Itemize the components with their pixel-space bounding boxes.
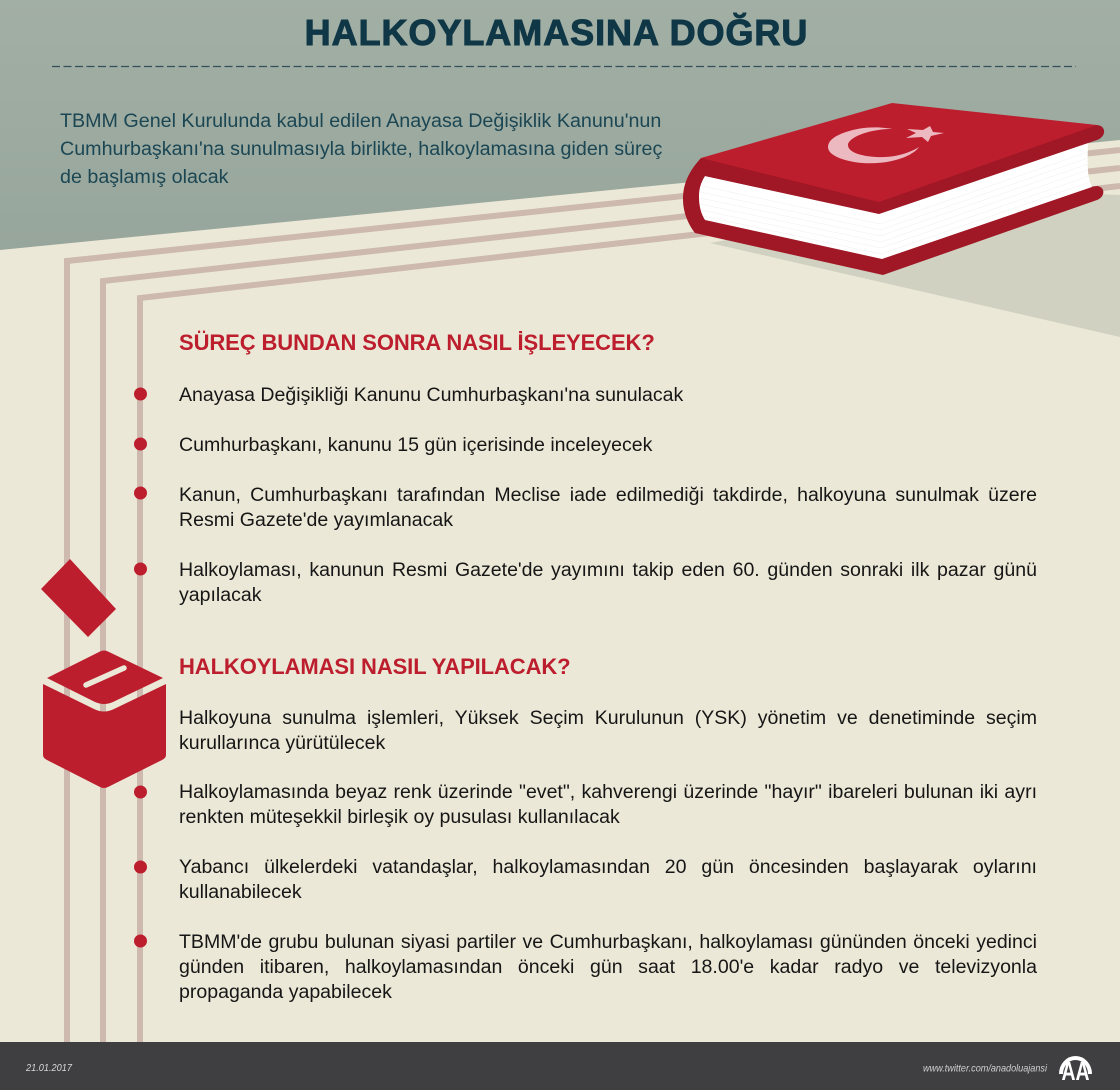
voting rules: Halkoyuna sunulma işlemleri, Yüksek Seçim Kurulunun (YSK) yönetim ve denetiminde seçim: [179, 707, 1037, 729]
process steps: Halkoylaması, kanunun Resmi Gazete'de yayımını takip eden 60. günden sonraki ilk pazar günü: [179, 559, 1037, 581]
heading: voting: HALKOYLAMASI NASIL YAPILACAK?: [179, 654, 570, 679]
heading: process: SÜREÇ BUNDAN SONRA NASIL İŞLEYECEK?: [179, 330, 655, 355]
voting rules: propaganda yapabilecek: [179, 981, 392, 1003]
footer date: 21.01.2017: [25, 1063, 72, 1074]
voting rules: kullanabilecek: [179, 881, 302, 903]
process steps: Cumhurbaşkanı, kanunu 15 gün içerisinde inceleyecek: [179, 434, 652, 456]
icon: ballot paper: [41, 559, 116, 637]
footer twitter address: www.twitter.com/anadoluajansi: [923, 1062, 1048, 1074]
bullets: [134, 388, 147, 948]
voting rules: günden itibaren, halkoylamasından önceki gün saat 18.00'e kadar radyo ve televizyonla: [179, 956, 1037, 978]
decorative book-page lines: [67, 150, 1120, 1042]
icon: crescent: [828, 127, 919, 163]
voting rules: renkten müteşekkil birleşik oy pusulası kullanılacak: [179, 806, 620, 828]
title: HALKOYLAMASINA DOĞRU: [305, 12, 808, 53]
process steps: [179, 384, 1037, 606]
background: grey-green sky: [0, 0, 1120, 250]
voting rules: Halkoylamasında beyaz renk üzerinde "evet", kahverengi üzerinde "hayır" ibareleri bulunan iki ayrı: [179, 781, 1037, 803]
book shadow: [710, 190, 1120, 337]
process steps: yapılacak: [179, 584, 262, 606]
intro text: [60, 110, 662, 188]
icon: ballot box: [43, 650, 166, 788]
voting rules: TBMM'de grubu bulunan siyasi partiler ve Cumhurbaşkanı, halkoylaması gününden önceki yedinci: [179, 931, 1037, 953]
title underline: [52, 66, 1076, 68]
intro text: TBMM Genel Kurulunda kabul edilen Anayasa Değişiklik Kanunu'nun: [60, 110, 661, 132]
voting rules: kurullarınca yürütülecek: [179, 732, 385, 754]
intro text: de başlamış olacak: [60, 166, 229, 188]
voting rules: Yabancı ülkelerdeki vatandaşlar, halkoylamasından 20 gün öncesinden başlayarak oylarını: [179, 856, 1037, 878]
process steps: Resmi Gazete'de yayımlanacak: [179, 509, 453, 531]
voting rules: [179, 707, 1037, 1003]
footer bar: [0, 1042, 1120, 1090]
process steps: Kanun, Cumhurbaşkanı tarafından Meclise iade edilmediği takdirde, halkoyuna sunulmak üzere: [179, 484, 1037, 506]
icon: red constitution book: [683, 103, 1104, 275]
icon: star: [906, 126, 944, 142]
process steps: Anayasa Değişikliği Kanunu Cumhurbaşkanı'na sunulacak: [179, 384, 683, 406]
logo: Anadolu Agency: AA: [1062, 1056, 1090, 1086]
intro text: Cumhurbaşkanı'na sunulmasıyla birlikte, halkoylamasına giden süreç: [60, 138, 662, 160]
